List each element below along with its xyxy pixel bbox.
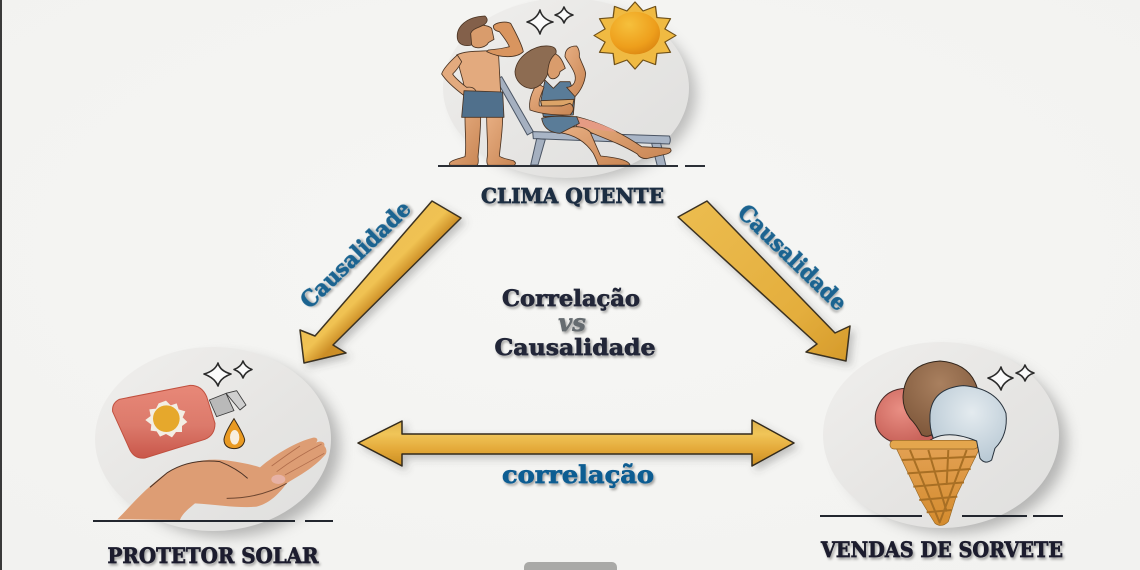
panel: vendas de sorvete	[820, 342, 1067, 562]
ground line	[438, 165, 705, 167]
label: clima quente: CLIMA QUENTE	[481, 184, 664, 208]
label: vendas de sorvete: VENDAS DE SORVETE	[820, 537, 1063, 562]
label: causalidade right: Causalidade	[732, 200, 852, 316]
woman	[515, 46, 671, 165]
icon: sun	[594, 2, 676, 69]
panel: clima quente	[438, 0, 705, 208]
drop	[224, 419, 245, 449]
label: correlacao: correlação	[502, 460, 654, 489]
icon: sparkles	[527, 7, 573, 34]
bottle cap	[209, 391, 246, 417]
bottom grey tab	[524, 562, 617, 570]
icon: sparkles	[204, 361, 252, 386]
icon: sparkles	[988, 365, 1034, 390]
bottle sun label	[145, 401, 187, 437]
arrow: causalidade right	[678, 201, 850, 361]
arrow: correlacao double	[358, 420, 794, 466]
bottle	[113, 385, 215, 458]
strawberry scoop	[875, 388, 933, 441]
man	[442, 16, 523, 165]
lounge chair	[496, 77, 670, 166]
cone	[896, 448, 980, 525]
ground line	[93, 520, 333, 522]
chocolate scoop	[903, 361, 977, 436]
heading: correlacao vs causalidade: Causalidade	[494, 335, 656, 361]
label: causalidade left: Causalidade	[296, 196, 416, 314]
heading: correlacao vs causalidade: vs	[558, 308, 586, 337]
arrow: causalidade left	[300, 201, 461, 363]
heading: correlacao vs causalidade	[494, 286, 656, 361]
illustration: man and woman on lounge chair	[442, 16, 671, 166]
illustration: ice cream cone	[875, 361, 1006, 525]
illustration: sunscreen and hand	[113, 385, 326, 520]
panel: protetor solar	[93, 347, 340, 568]
vanilla scoop	[930, 386, 1006, 462]
cone rim	[890, 440, 978, 449]
hand	[117, 438, 326, 520]
disc: protetor solar	[95, 347, 340, 537]
disc: clima quente	[443, 0, 696, 181]
label: protetor solar: PROTETOR SOLAR	[108, 543, 319, 568]
ground line	[820, 515, 1063, 517]
disc: vendas de sorvete	[823, 342, 1067, 533]
heading: correlacao vs causalidade: Correlação	[502, 286, 640, 312]
